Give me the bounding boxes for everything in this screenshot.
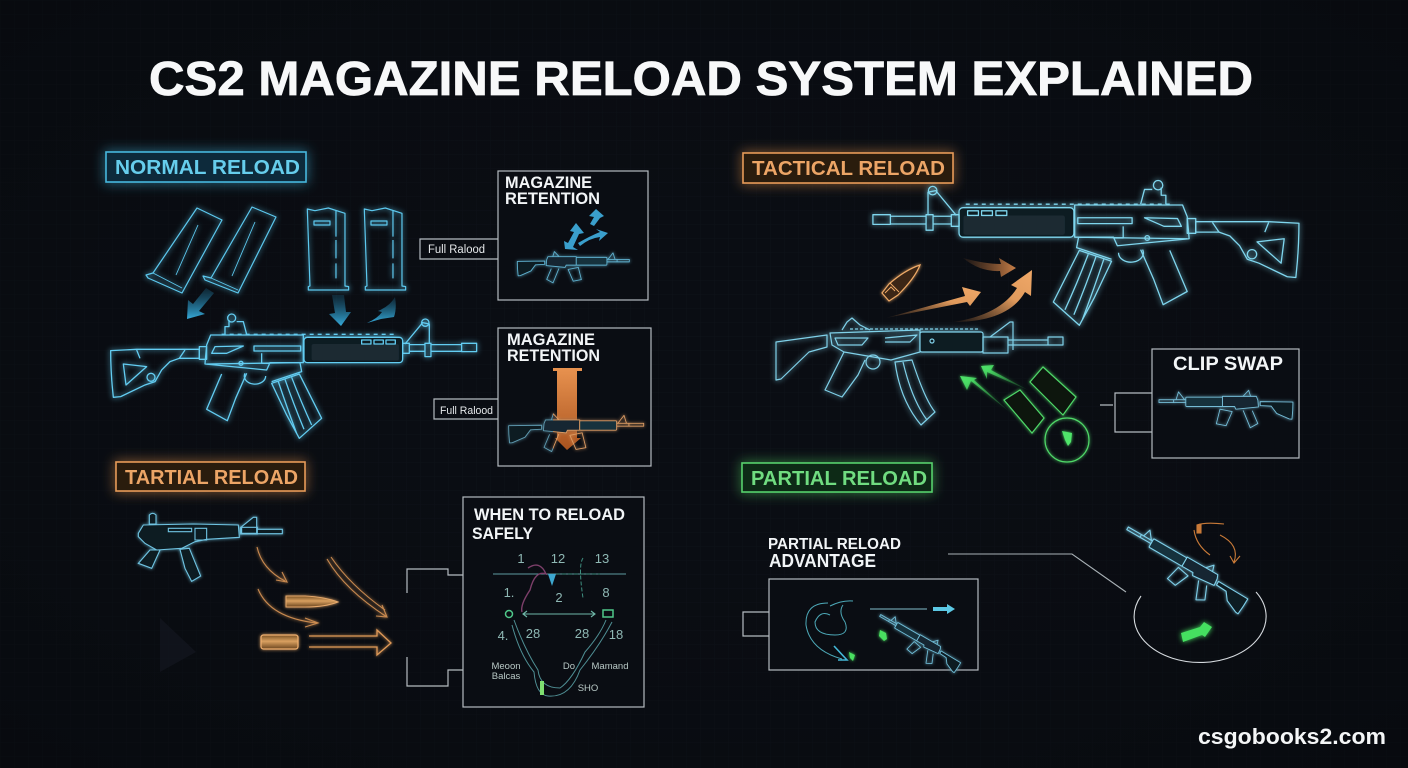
heading: tartial reload: TARTIAL RELOAD	[125, 467, 298, 489]
arrow: outline right	[309, 630, 391, 655]
chart: reload timing diagram	[491, 551, 628, 696]
panel: partial reload	[742, 463, 1266, 678]
chart: reload timing diagram: Meoon	[491, 661, 521, 672]
chart: reload timing diagram: 18	[609, 627, 623, 642]
panel: when to reload safely: SAFELY	[472, 525, 533, 543]
chart: reload timing diagram: 28	[575, 626, 589, 641]
arrow: green bent	[1181, 622, 1212, 642]
title: CS2 MAGAZINE RELOAD SYSTEM EXPLAINED	[149, 53, 1253, 106]
chart: reload timing diagram: Mamand	[592, 661, 628, 672]
panel: tactical reload	[743, 153, 1299, 462]
heading: normal reload	[106, 152, 306, 182]
rifle: normal reload	[111, 314, 477, 438]
arrow: cyan right	[870, 604, 955, 614]
heading: tartial reload	[116, 462, 305, 491]
text: partial reload advantage	[768, 536, 901, 571]
arrows: orange rotate	[1194, 523, 1240, 563]
arrow: into rifle centre	[329, 295, 351, 326]
arrows: green return	[960, 365, 1030, 414]
chart: reload timing diagram: 28	[526, 626, 540, 641]
icon: green circle target	[1045, 418, 1089, 462]
chart: reload timing diagram: 8	[602, 585, 610, 600]
panel: clip swap: CLIP SWAP	[1173, 354, 1283, 375]
panel: advantage diagram	[743, 579, 978, 678]
panel: magazine retention bottom: MAGAZINE	[507, 331, 595, 349]
chart: reload timing diagram: 1	[517, 551, 525, 566]
icon: ground ellipse	[1134, 592, 1266, 662]
arrows: thin curved orange	[257, 547, 387, 627]
arrows: retention spread	[564, 209, 608, 250]
heading: tactical reload: TACTICAL RELOAD	[752, 157, 945, 180]
icon: reload swirl	[806, 601, 853, 660]
text: partial reload advantage: ADVANTAGE	[769, 551, 876, 571]
chart: reload timing diagram: 2	[555, 590, 563, 605]
panel: magazine retention top: MAGAZINE	[505, 174, 592, 192]
icon: bullet pointed	[286, 596, 338, 607]
chart: reload timing diagram: 13	[595, 551, 609, 566]
rifle: tactical lower	[776, 318, 1063, 425]
panel: magazine retention top: Full Ralood	[428, 244, 485, 256]
chart: reload timing diagram: Balcas	[492, 671, 521, 682]
arrow: into rifle left	[187, 288, 214, 319]
heading: normal reload: NORMAL RELOAD	[115, 156, 300, 179]
callout line	[948, 554, 1126, 592]
rifle: diagonal large	[1114, 519, 1254, 622]
panel: magazine retention bottom: RETENTION	[507, 347, 600, 365]
rifle: clip swap	[1159, 390, 1293, 428]
rifle: tactical large	[873, 181, 1299, 325]
panel: when to reload safely: WHEN TO RELOAD	[474, 506, 625, 524]
panel: magazine retention top	[420, 171, 648, 300]
chart: reload timing diagram: 12	[551, 551, 565, 566]
text: partial reload advantage: PARTIAL RELOAD	[768, 536, 901, 553]
icon: bullet case	[261, 635, 298, 649]
icon: upright magazines	[307, 208, 406, 290]
panel: when to reload safely	[407, 497, 644, 707]
arrow: curved into rifle	[367, 297, 396, 323]
panel: normal reload	[106, 152, 651, 466]
rifle: retention top	[517, 252, 629, 283]
chart: reload timing diagram: 1.	[504, 585, 514, 600]
panel: tartial reload	[116, 462, 644, 707]
panel: clip swap	[1100, 349, 1299, 458]
rifle: small diagonal	[871, 609, 965, 678]
panel: magazine retention top: RETENTION	[505, 190, 600, 208]
icon: green sparks	[849, 630, 887, 661]
panel: magazine retention bottom	[434, 328, 651, 466]
icon: green magazines	[1004, 367, 1076, 433]
panel: magazine retention bottom: Full Ralood	[440, 405, 493, 417]
watermark: csgobooks2.com	[1198, 724, 1386, 749]
heading: partial reload	[742, 463, 932, 492]
arrows: orange flow	[886, 258, 1032, 322]
arrow: orange downward	[553, 368, 582, 450]
icon: bullet	[882, 265, 920, 301]
rifle: smg	[138, 513, 282, 581]
chart: reload timing diagram: 4.	[498, 628, 508, 643]
chart: reload timing diagram: Do	[563, 661, 575, 672]
chart: reload timing diagram: SHO	[578, 683, 598, 694]
icon: angled magazines	[146, 207, 276, 293]
rifle: retention bottom	[509, 414, 644, 452]
heading: partial reload: PARTIAL RELOAD	[751, 468, 927, 490]
